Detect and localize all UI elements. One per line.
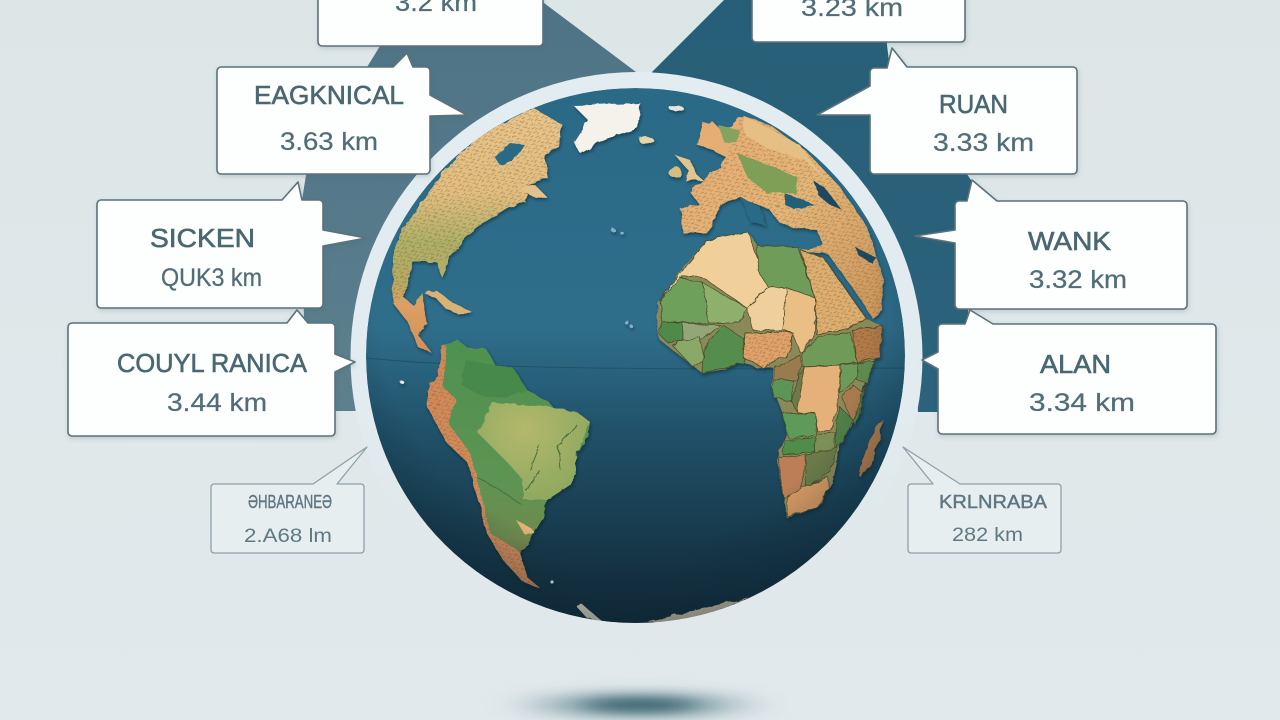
callout: top right [752, 0, 965, 42]
callout: Wank: WANK [1028, 226, 1112, 256]
callout: Alan: 3.34 km [1029, 389, 1135, 417]
globe [366, 88, 905, 624]
British Isles [675, 155, 703, 181]
Ireland [669, 166, 681, 178]
callout: small left [211, 447, 367, 553]
callout: Ruan: RUAN [939, 89, 1008, 119]
callout: Couyl Ranica: 3.44 km [167, 389, 267, 417]
Svalbard [669, 105, 683, 111]
callout: Couyl Ranica: COUYL RANICA [117, 348, 308, 378]
Antarctica [647, 597, 750, 624]
North America [392, 108, 563, 353]
callout: Ruan [817, 48, 1077, 174]
Greenland [573, 103, 640, 153]
continents [392, 103, 883, 624]
callout: Sicken: SICKEN [150, 223, 255, 253]
callout: Wank: 3.32 km [1029, 266, 1127, 294]
callout: Wank [915, 180, 1187, 309]
callout: small right: 282 km [952, 525, 1023, 546]
callout: Sicken [97, 182, 366, 308]
Madagascar [859, 418, 882, 477]
callout: small left: 2.A68 lm [244, 526, 332, 547]
South America [428, 340, 590, 588]
callout: Couyl Ranica [68, 310, 355, 436]
callout: small right: KRLNRABA [939, 492, 1047, 512]
Eurasia [680, 115, 883, 318]
callout: Alan: ALAN [1040, 349, 1111, 379]
callout: small left: ƏHBARANEƏ [248, 492, 332, 512]
callout: Eagknical: EAGKNICAL [254, 80, 404, 110]
small islands [400, 228, 634, 584]
globe limb shading [367, 263, 905, 623]
Iceland [639, 136, 653, 144]
ground shadow [526, 695, 750, 715]
callout: Eagknical: 3.63 km [280, 128, 378, 156]
Africa [657, 232, 883, 518]
right dark wedge backdrop [636, 0, 971, 412]
ocean [366, 88, 905, 623]
globe outer ring [350, 72, 922, 642]
callout: Ruan: 3.33 km [933, 129, 1034, 157]
callout: Eagknical [217, 53, 467, 174]
callout: Alan [922, 310, 1216, 434]
callout: Sicken: QUK3 km [161, 264, 262, 292]
callout: top left [318, 0, 543, 46]
callout: small right [903, 447, 1061, 553]
left dark wedge backdrop [302, 0, 636, 411]
Antarctic Peninsula [577, 605, 603, 622]
